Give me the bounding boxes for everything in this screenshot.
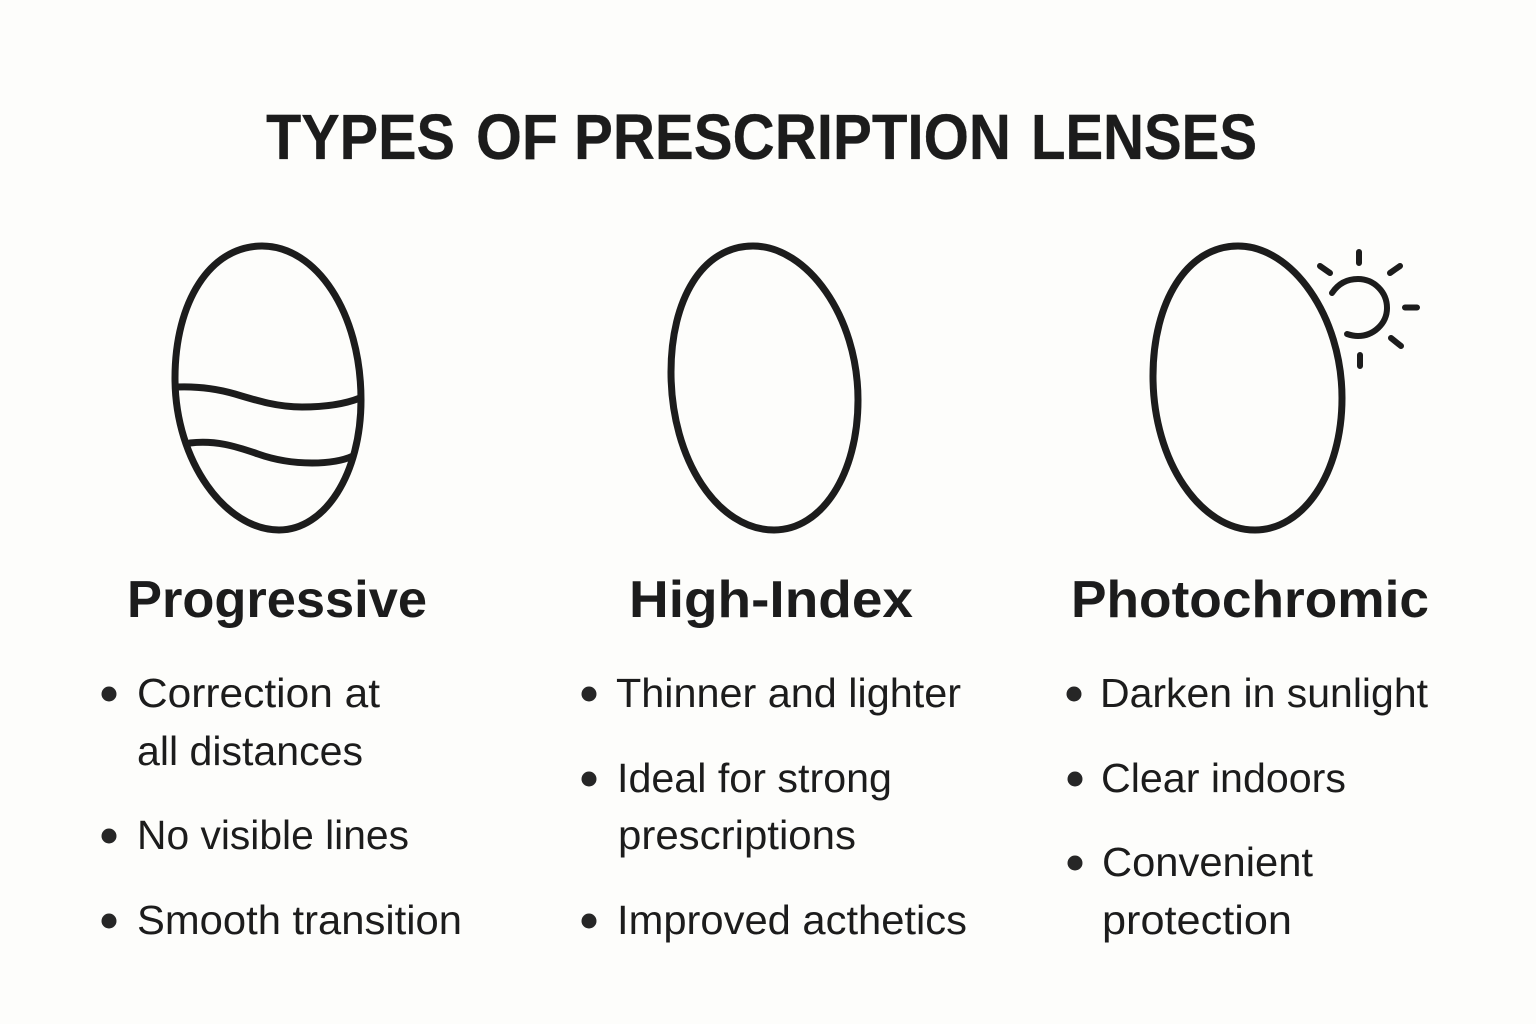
title: OF [476,101,558,173]
list: progressive [102,670,462,943]
list: progressive: Smooth transition [137,897,462,943]
heading: high-index: High-Index [629,571,913,629]
list: photochromic: Convenient [1102,839,1314,885]
icon: progressive lens [175,246,361,530]
panel: progressive [102,246,462,943]
icon: sun [1320,252,1417,366]
list: photochromic [1066,670,1429,943]
icon: photochromic lens [1153,246,1342,530]
list: high-index: Thinner and lighter [616,670,961,716]
list: progressive: No visible lines [137,812,409,858]
title: LENSES [1031,101,1257,173]
list: photochromic: Clear indoors [1101,755,1346,801]
panel: high-index [582,246,967,943]
heading: photochromic: Photochromic [1071,571,1429,629]
title: TYPES [266,101,455,173]
list: progressive: all distances [137,728,363,774]
heading: progressive: Progressive [127,571,427,629]
panel: photochromic [1066,246,1429,943]
list: high-index [582,670,967,943]
list: photochromic: Darken in sunlight [1100,670,1429,716]
list: high-index: prescriptions [618,812,856,858]
list: high-index: Ideal for strong [617,755,892,801]
title: PRESCRIPTION [574,101,1011,173]
title [266,101,1257,173]
list: photochromic: protection [1102,897,1292,943]
list: progressive: Correction at [137,670,381,716]
icon: high-index lens [671,246,858,530]
list: high-index: Improved acthetics [617,897,967,943]
